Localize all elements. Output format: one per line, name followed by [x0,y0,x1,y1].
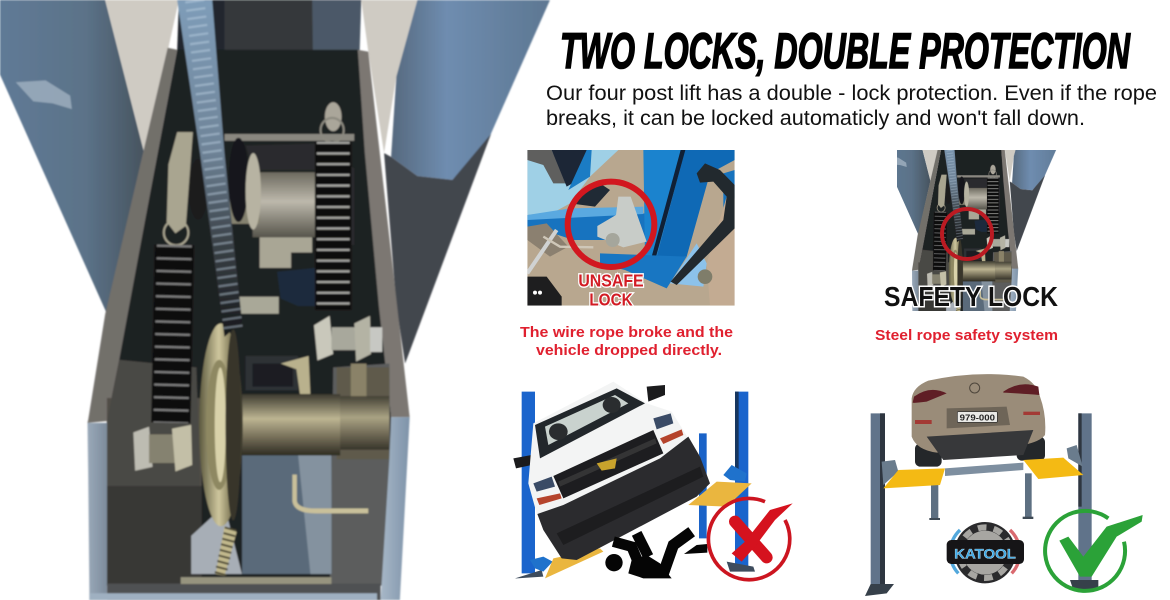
icon: green check [1045,511,1143,591]
illustration: car on safe four post lift [865,374,1143,596]
truck [513,382,710,560]
panel: safety lock photo [883,131,1064,329]
panel: unsafe lock photo [527,150,735,309]
illustration: truck falling off unsafe lift [513,382,793,580]
logo: KATOOL: KATOOL [954,545,1016,561]
logo: KATOOL [947,522,1024,583]
label: safety lock: SAFETY LOCK [884,281,1058,312]
intro text: breaks, it can be locked automaticly and won't fall down. [546,107,1085,130]
icon: red cross [708,498,793,580]
label: unsafe lock: UNSAFE [578,271,644,291]
intro text [546,82,1157,130]
intro text: Our four post lift has a double - lock protection. Even if the rope [546,82,1157,105]
caption: safe: Steel rope safety system [875,327,1058,344]
caption: unsafe: vehicle dropped directly. [536,342,722,359]
car: 979-000 [960,412,995,422]
label: unsafe lock [578,271,644,309]
label: unsafe lock: LOCK [589,289,633,309]
car [912,374,1045,467]
icon: fallen person [605,532,707,578]
photo: safety lock mechanism close-up [0,0,550,600]
caption: unsafe: The wire rope broke and the [520,324,733,341]
caption: unsafe [520,324,733,359]
